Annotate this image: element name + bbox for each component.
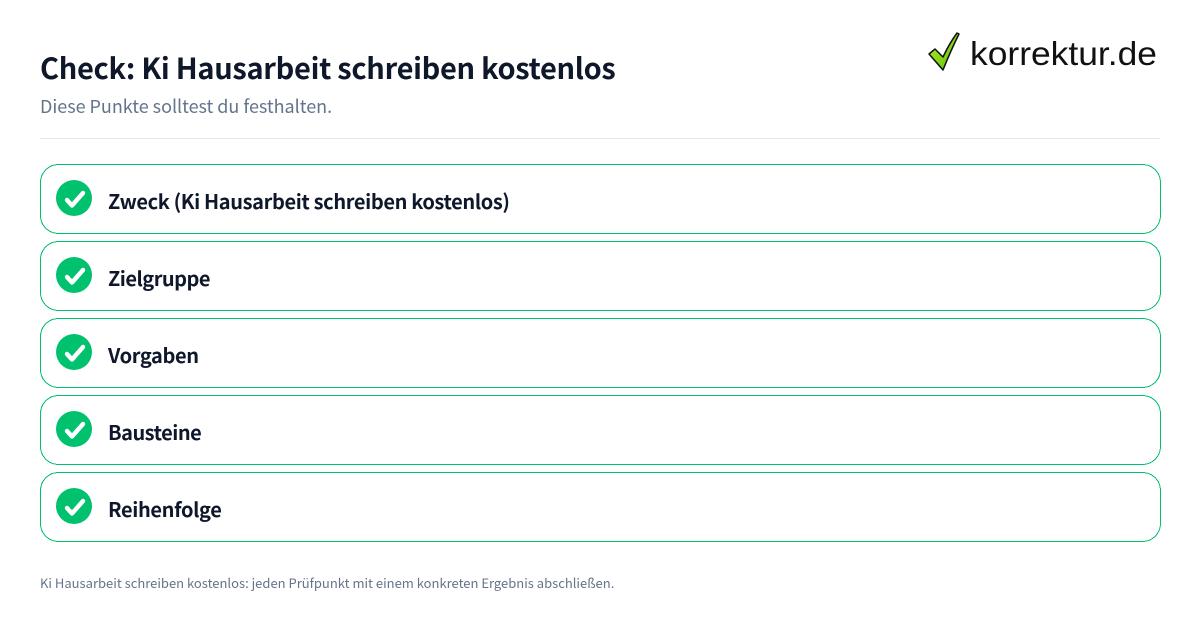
divider: [40, 138, 1160, 139]
title: Check: Ki Hausarbeit schreiben kostenlos: [40, 46, 615, 88]
icon: check: [56, 488, 92, 524]
item label: Reihenfolge: [108, 494, 221, 523]
item label: Bausteine: [108, 417, 201, 446]
logo: korrektur.de: korrektur.de: [970, 35, 1157, 72]
item label: Vorgaben: [108, 340, 199, 369]
icon: check: [56, 180, 92, 216]
icon: check: [56, 257, 92, 293]
icon: check: [56, 334, 92, 370]
item label: Zielgruppe: [108, 263, 210, 292]
checklist item: Zweck: [40, 164, 1161, 234]
item label: Zweck (Ki Hausarbeit schreiben kostenlos): [108, 186, 510, 215]
checklist item: Vorgaben: [40, 318, 1161, 388]
icon: check: [56, 411, 92, 447]
subtitle: Diese Punkte solltest du festhalten.: [40, 93, 332, 119]
checklist item: Bausteine: [40, 395, 1161, 465]
checklist item: Zielgruppe: [40, 241, 1161, 311]
footer note: Ki Hausarbeit schreiben kostenlos: jeden Prüfpunkt mit einem konkreten Ergebnis abschließen.: [40, 573, 614, 592]
checklist item: Reihenfolge: [40, 472, 1161, 542]
